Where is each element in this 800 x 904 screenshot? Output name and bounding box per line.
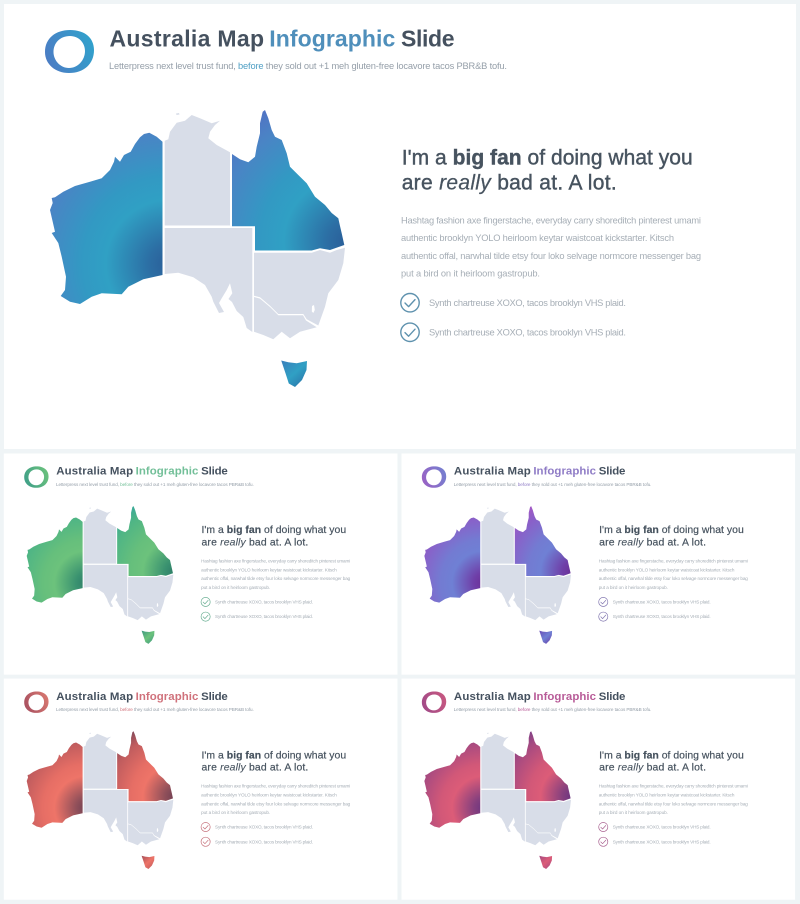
- state: New South Wales: [526, 575, 571, 613]
- checklist item 2: [201, 837, 313, 846]
- state: Northern Territory: [481, 733, 514, 789]
- panel: purple slide: [401, 453, 795, 675]
- state: Tasmania: [142, 856, 154, 869]
- panel: magenta slide: [401, 679, 795, 900]
- heading: are really bad at. A lot.: [599, 538, 706, 549]
- title: Australia Map: [454, 466, 531, 478]
- state: Northern Territory: [165, 113, 230, 226]
- state: Western Australia: [50, 133, 162, 304]
- body paragraph: authentic offal, narwhal tilde etsy four loko selvage normcore messenger bag: [201, 801, 351, 806]
- body paragraph: [599, 784, 748, 815]
- title: Infographic: [136, 466, 199, 478]
- title: Australia Map: [454, 691, 531, 703]
- state: South Australia: [481, 565, 525, 617]
- state: Tasmania: [281, 360, 307, 387]
- state: Victoria: [526, 599, 557, 620]
- checklist item 2: Synth chartreuse XOXO, tacos brooklyn VHS plaid.: [429, 328, 626, 338]
- checklist item 2: Synth chartreuse XOXO, tacos brooklyn VHS plaid.: [215, 839, 313, 844]
- body paragraph: authentic offal, narwhal tilde etsy four loko selvage normcore messenger bag: [201, 576, 351, 581]
- title: Infographic: [269, 26, 396, 52]
- state: Tasmania: [539, 856, 552, 869]
- body paragraph: Hashtag fashion axe fingerstache, everyday carry shoreditch pinterest umami: [599, 784, 748, 789]
- body paragraph: [401, 216, 701, 278]
- title: [454, 466, 625, 478]
- panel: red slide: [4, 679, 397, 900]
- panel: green slide: [4, 453, 397, 675]
- state: South Australia: [84, 565, 127, 617]
- map of Australia: [50, 110, 345, 387]
- body paragraph: authentic offal, narwhal tilde etsy four loko selvage normcore messenger bag: [401, 251, 701, 261]
- heading: [599, 525, 744, 549]
- body paragraph: put a bird on it heirloom gastropub.: [401, 268, 540, 278]
- map of Australia: [27, 731, 173, 869]
- state: Western Australia: [27, 743, 83, 828]
- state: Northern Territory: [84, 508, 116, 564]
- title: [110, 26, 454, 52]
- body paragraph: authentic offal, narwhal tilde etsy four loko selvage normcore messenger bag: [599, 576, 748, 581]
- state: New South Wales: [128, 575, 173, 613]
- checklist item 1: Synth chartreuse XOXO, tacos brooklyn VHS plaid.: [215, 600, 313, 605]
- body paragraph: Hashtag fashion axe fingerstache, everyday carry shoreditch pinterest umami: [201, 784, 350, 789]
- state: Western Australia: [424, 743, 480, 828]
- heading: I'm a big fan of doing what you: [201, 750, 346, 761]
- checklist item 1: [599, 822, 711, 832]
- title: Australia Map: [110, 26, 264, 52]
- title: Slide: [599, 466, 625, 478]
- state: South Australia: [481, 790, 525, 842]
- heading: [201, 525, 346, 549]
- title: Australia Map: [56, 466, 133, 478]
- checklist item 1: [401, 294, 626, 312]
- state: Northern Territory: [84, 733, 116, 789]
- state: Queensland: [117, 731, 173, 801]
- body paragraph: put a bird on it heirloom gastropub.: [201, 810, 270, 815]
- body paragraph: authentic brooklyn YOLO heirloom keytar waistcoat kickstarter. Kitsch: [201, 792, 337, 797]
- title: Slide: [201, 466, 228, 478]
- heading: [402, 146, 693, 194]
- state: New South Wales: [526, 800, 571, 838]
- state: Victoria: [128, 824, 159, 845]
- icon: magenta ring logo: [422, 692, 446, 713]
- body paragraph: authentic brooklyn YOLO heirloom keytar waistcoat kickstarter. Kitsch: [401, 233, 674, 243]
- body paragraph: Hashtag fashion axe fingerstache, everyday carry shoreditch pinterest umami: [599, 559, 748, 564]
- checklist item 2: [599, 837, 711, 846]
- map of Australia: [424, 506, 571, 644]
- heading: I'm a big fan of doing what you: [599, 750, 744, 761]
- state: Queensland: [117, 506, 173, 576]
- title: Australia Map: [56, 691, 133, 703]
- title: Slide: [201, 691, 228, 703]
- body paragraph: authentic brooklyn YOLO heirloom keytar waistcoat kickstarter. Kitsch: [599, 567, 735, 572]
- state: Queensland: [515, 731, 571, 801]
- state: New South Wales: [128, 800, 173, 838]
- checklist item 1: Synth chartreuse XOXO, tacos brooklyn VHS plaid.: [429, 298, 626, 308]
- title: Slide: [599, 691, 625, 703]
- state: Tasmania: [142, 631, 154, 644]
- title: Infographic: [533, 691, 597, 703]
- title: Infographic: [136, 691, 199, 703]
- subtitle: Letterpress next level trust fund, before they sold out +1 meh gluten-free locavore tacos PBR&B tofu.: [56, 482, 254, 487]
- checklist item 1: [201, 822, 313, 832]
- heading: are really bad at. A lot.: [402, 171, 617, 194]
- title: [56, 691, 228, 703]
- checklist item 1: Synth chartreuse XOXO, tacos brooklyn VHS plaid.: [613, 600, 711, 605]
- heading: I'm a big fan of doing what you: [402, 146, 693, 169]
- panel: blue slide: [4, 4, 796, 449]
- state: New South Wales: [254, 248, 345, 326]
- body paragraph: put a bird on it heirloom gastropub.: [599, 585, 668, 590]
- checklist item 2: Synth chartreuse XOXO, tacos brooklyn VHS plaid.: [613, 614, 711, 619]
- body paragraph: [201, 784, 351, 815]
- body paragraph: put a bird on it heirloom gastropub.: [201, 585, 270, 590]
- state: Northern Territory: [481, 508, 514, 564]
- body paragraph: authentic offal, narwhal tilde etsy four loko selvage normcore messenger bag: [599, 801, 748, 806]
- icon: green ring logo: [24, 466, 49, 488]
- subtitle: Letterpress next level trust fund, before they sold out +1 meh gluten-free locavore tacos PBR&B tofu.: [454, 707, 651, 712]
- checklist item 1: [201, 597, 313, 607]
- state: Western Australia: [27, 517, 83, 603]
- body paragraph: put a bird on it heirloom gastropub.: [599, 810, 668, 815]
- checklist item 2: [201, 612, 313, 621]
- title: [56, 466, 228, 478]
- checklist item 2: [599, 612, 711, 621]
- state: South Australia: [84, 790, 127, 842]
- map of Australia: [27, 506, 173, 644]
- icon: blue ring logo: [45, 30, 94, 73]
- subtitle: Letterpress next level trust fund, before they sold out +1 meh gluten-free locavore tacos PBR&B tofu.: [56, 707, 254, 712]
- subtitle: Letterpress next level trust fund, before they sold out +1 meh gluten-free locavore tacos PBR&B tofu.: [454, 482, 651, 487]
- body paragraph: Hashtag fashion axe fingerstache, everyday carry shoreditch pinterest umami: [201, 559, 350, 564]
- body paragraph: [201, 559, 351, 590]
- checklist item 1: Synth chartreuse XOXO, tacos brooklyn VHS plaid.: [613, 825, 711, 830]
- body paragraph: Hashtag fashion axe fingerstache, everyday carry shoreditch pinterest umami: [401, 216, 701, 226]
- heading: [201, 750, 346, 774]
- map of Australia: [424, 731, 571, 869]
- state: Victoria: [526, 824, 557, 845]
- heading: are really bad at. A lot.: [201, 538, 308, 549]
- heading: I'm a big fan of doing what you: [201, 525, 346, 536]
- icon: red ring logo: [24, 692, 49, 713]
- heading: are really bad at. A lot.: [201, 763, 308, 774]
- state: South Australia: [165, 228, 252, 332]
- heading: are really bad at. A lot.: [599, 763, 706, 774]
- state: Western Australia: [424, 517, 480, 603]
- state: Tasmania: [539, 631, 552, 644]
- title: [454, 691, 625, 703]
- checklist item 2: Synth chartreuse XOXO, tacos brooklyn VHS plaid.: [613, 839, 711, 844]
- state: Queensland: [515, 506, 571, 576]
- state: Queensland: [232, 110, 344, 250]
- checklist item 2: Synth chartreuse XOXO, tacos brooklyn VHS plaid.: [215, 614, 313, 619]
- icon: purple ring logo: [422, 466, 446, 488]
- body paragraph: authentic brooklyn YOLO heirloom keytar waistcoat kickstarter. Kitsch: [201, 567, 337, 572]
- checklist item 1: Synth chartreuse XOXO, tacos brooklyn VHS plaid.: [215, 825, 313, 830]
- state: Victoria: [254, 297, 317, 339]
- heading: [599, 750, 744, 774]
- title: Slide: [401, 26, 454, 52]
- state: Victoria: [128, 599, 159, 620]
- subtitle: Letterpress next level trust fund, before they sold out +1 meh gluten-free locavore tacos PBR&B tofu.: [109, 61, 507, 71]
- body paragraph: [599, 559, 748, 590]
- title: Infographic: [533, 466, 597, 478]
- checklist item 1: [599, 597, 711, 607]
- heading: I'm a big fan of doing what you: [599, 525, 744, 536]
- checklist item 2: [401, 323, 626, 341]
- body paragraph: authentic brooklyn YOLO heirloom keytar waistcoat kickstarter. Kitsch: [599, 792, 735, 797]
